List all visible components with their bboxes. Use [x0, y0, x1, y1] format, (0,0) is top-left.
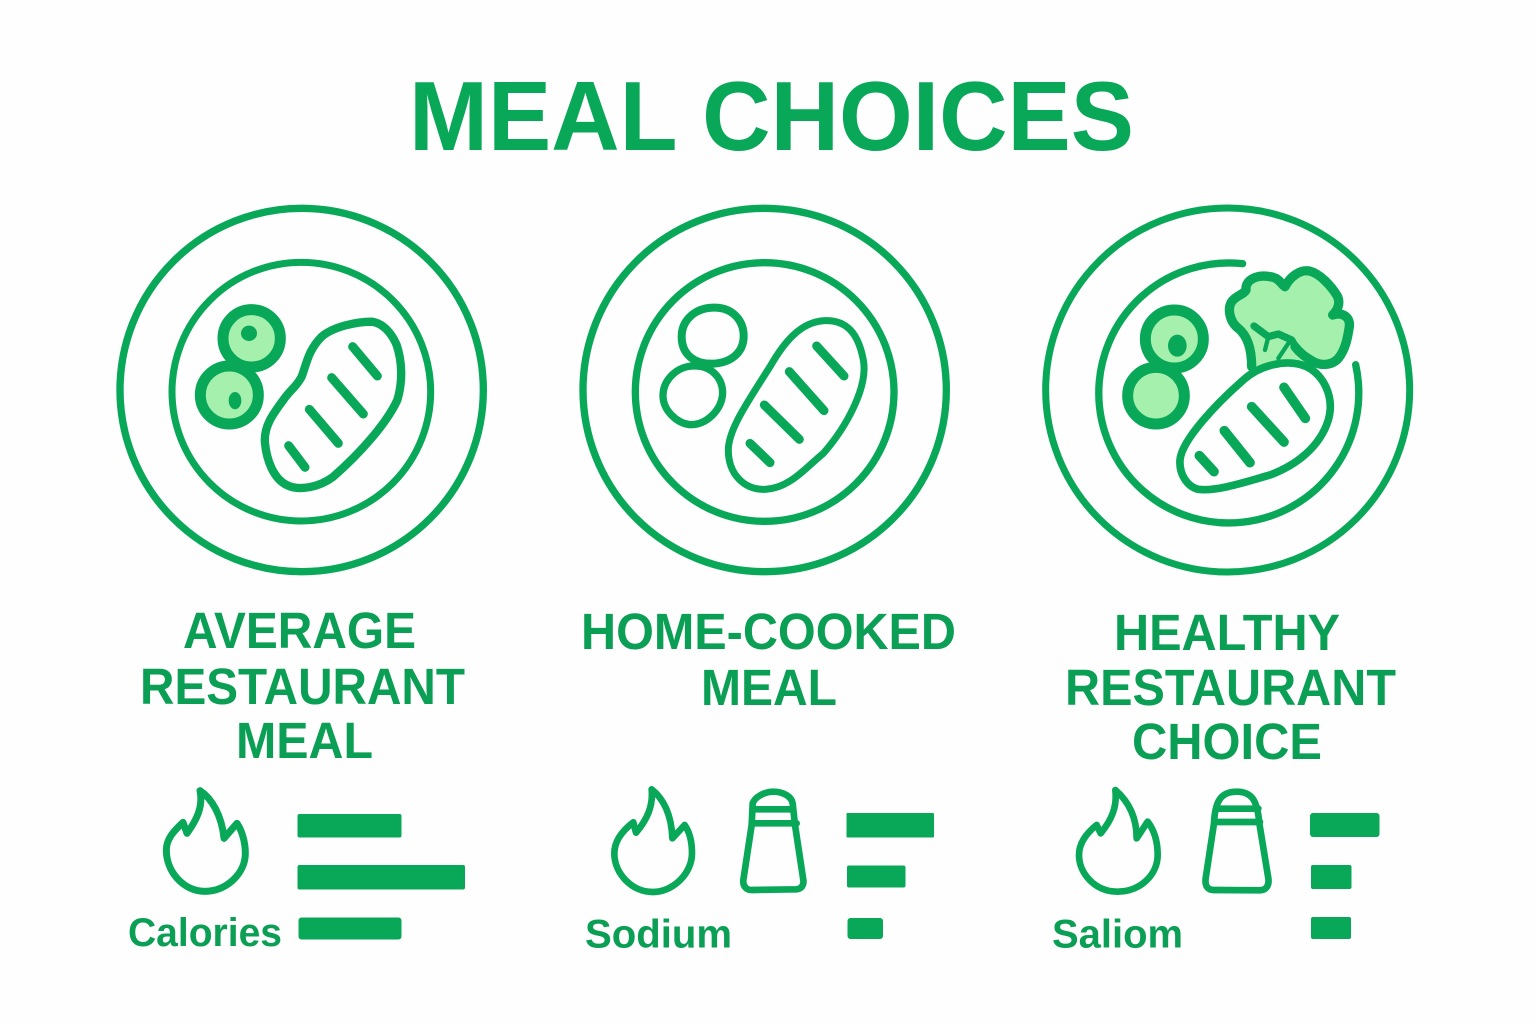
panel: healthy restaurant choice — [1046, 208, 1410, 956]
icon: salt shaker — [1205, 792, 1269, 890]
label: sodium: Sodium — [585, 912, 732, 956]
label: healthy restaurant choice: HEALTHY — [1114, 604, 1340, 661]
panel: average restaurant meal — [120, 208, 483, 955]
bar chart — [298, 814, 465, 940]
label: home-cooked meal — [581, 603, 956, 716]
label: healthy restaurant choice: RESTAURANT — [1065, 659, 1396, 716]
bar chart — [1310, 813, 1380, 939]
title: MEAL CHOICES — [409, 61, 1134, 171]
label: healthy restaurant choice — [1065, 604, 1396, 770]
icon: plate with peas, steak and broccoli — [1046, 208, 1410, 572]
icon: plate with outlined peas and steak — [583, 208, 946, 572]
label: home-cooked meal: MEAL — [701, 659, 837, 716]
label: home-cooked meal: HOME-COOKED — [581, 603, 956, 660]
label: healthy restaurant choice: CHOICE — [1132, 713, 1322, 770]
icon: flame — [1079, 790, 1158, 892]
label: average restaurant meal: AVERAGE — [183, 602, 416, 659]
icon: plate with peas and steak — [120, 208, 483, 572]
bar chart — [846, 813, 934, 939]
label: average restaurant meal — [140, 602, 465, 769]
label: saliom: Saliom — [1052, 912, 1183, 956]
panel: home-cooked meal — [581, 208, 956, 957]
icon: broccoli — [1229, 271, 1349, 367]
icon: salt shaker — [743, 792, 803, 890]
label: calories: Calories — [128, 911, 282, 955]
icon: flame — [614, 789, 692, 892]
icon: flame — [166, 791, 245, 891]
label: average restaurant meal: RESTAURANT — [140, 658, 465, 715]
label: average restaurant meal: MEAL — [236, 712, 373, 769]
